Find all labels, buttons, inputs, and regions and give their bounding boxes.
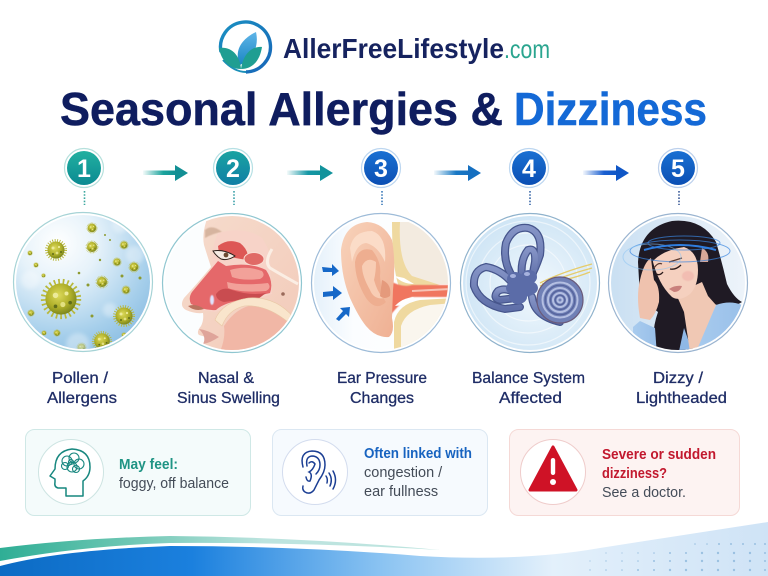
nerves bbox=[540, 264, 592, 288]
text: see a doctor: See a doctor. bbox=[602, 485, 686, 501]
icon: warning triangle bbox=[520, 440, 586, 504]
label 4: Affected bbox=[499, 390, 562, 407]
eye bbox=[213, 251, 235, 260]
nostril bbox=[188, 305, 204, 310]
eyes brows lips bbox=[656, 265, 681, 275]
step badge 5: 5 bbox=[671, 155, 685, 183]
pressure arrows bbox=[322, 264, 350, 321]
label 2: Sinus Swelling bbox=[177, 390, 280, 407]
canals bbox=[474, 228, 560, 322]
throat area bbox=[221, 306, 288, 350]
arrow 2 to 3 bbox=[287, 165, 333, 181]
label 1: Allergens bbox=[47, 390, 117, 407]
panel: dizzy woman illustration bbox=[608, 214, 748, 356]
brow bbox=[205, 227, 222, 238]
hair front bbox=[652, 247, 684, 262]
label 4: Balance System bbox=[472, 370, 585, 387]
label 2 bbox=[177, 370, 280, 407]
text: often linked with: Often linked with bbox=[364, 446, 472, 462]
wordmark: AllerFreeLifestyle bbox=[283, 33, 504, 64]
step badge 4: 4 bbox=[522, 155, 536, 183]
canal red bbox=[392, 282, 448, 314]
text: ear fullness: ear fullness bbox=[364, 484, 438, 500]
label 2: Nasal & bbox=[198, 370, 254, 387]
icon: head with tangled brain bbox=[38, 440, 104, 504]
panel: inner ear illustration bbox=[460, 214, 600, 352]
label 5 bbox=[636, 370, 727, 407]
panel: nasal sinus illustration bbox=[162, 210, 310, 356]
hand bbox=[638, 258, 659, 320]
arrow 1 to 2 bbox=[143, 165, 188, 181]
arrow 4 to 5 bbox=[583, 165, 629, 181]
icon: leaf ring logo bbox=[219, 22, 270, 72]
text: may feel: May feel: bbox=[119, 457, 178, 473]
cochlea bbox=[537, 277, 583, 323]
step badge 3: 3 bbox=[374, 155, 388, 183]
domain suffix: .com bbox=[504, 34, 550, 64]
sphenoid sinus bbox=[244, 252, 264, 266]
logo: AllerFreeLifestyle.com bbox=[219, 22, 550, 72]
label 5: Lightheaded bbox=[636, 390, 727, 407]
step badge 1 bbox=[64, 148, 104, 205]
palate bbox=[215, 298, 294, 326]
turbinates bbox=[227, 268, 270, 292]
title blue part: Dizziness bbox=[514, 83, 707, 135]
dizziness swirl bbox=[623, 236, 730, 270]
lower turbinate hollow bbox=[216, 289, 266, 302]
label 3 bbox=[337, 370, 427, 407]
label 4 bbox=[472, 370, 585, 407]
neck and chest bbox=[676, 282, 716, 352]
footer wave bbox=[0, 522, 768, 576]
panel: often linked card bbox=[272, 430, 488, 516]
panel: severe dizziness warning card bbox=[510, 430, 740, 516]
arrow 3 to 4 bbox=[434, 165, 481, 181]
step badge 1: 1 bbox=[77, 155, 91, 183]
label 3: Changes bbox=[350, 390, 414, 407]
title bbox=[60, 83, 707, 135]
text: congestion: congestion / bbox=[364, 465, 443, 481]
step labels bbox=[47, 370, 727, 407]
text: severe or sudden: Severe or sudden bbox=[602, 447, 716, 463]
back of head bone bbox=[267, 249, 298, 284]
step badge 3 bbox=[362, 148, 400, 205]
step badge 2: 2 bbox=[226, 155, 240, 183]
vestibule bbox=[506, 270, 538, 304]
label 1: Pollen / bbox=[52, 370, 109, 387]
text: dizziness: dizziness? bbox=[602, 466, 667, 482]
label 3: Ear Pressure bbox=[337, 370, 427, 387]
label 5: Dizzy / bbox=[653, 370, 704, 387]
step badge 4 bbox=[510, 148, 548, 205]
panel: ear pressure illustration bbox=[312, 214, 455, 352]
face bbox=[652, 247, 698, 299]
hair back bbox=[638, 221, 742, 352]
panel: may feel card bbox=[26, 430, 250, 516]
step badge 5 bbox=[658, 148, 698, 205]
panel: pollen illustration bbox=[14, 212, 152, 357]
blazer bbox=[633, 321, 656, 346]
title dark part: Seasonal Allergies & bbox=[60, 83, 503, 135]
text: foggy: foggy, off balance bbox=[119, 476, 229, 492]
ear pinna bbox=[341, 222, 394, 337]
bone cream bbox=[400, 222, 448, 284]
step badge 2 bbox=[214, 148, 252, 205]
icon: ear with sound waves bbox=[282, 440, 348, 504]
label 1 bbox=[47, 370, 117, 407]
lips bbox=[199, 329, 219, 344]
frontal sinus bbox=[218, 241, 248, 260]
nasal cavity bbox=[190, 261, 271, 310]
